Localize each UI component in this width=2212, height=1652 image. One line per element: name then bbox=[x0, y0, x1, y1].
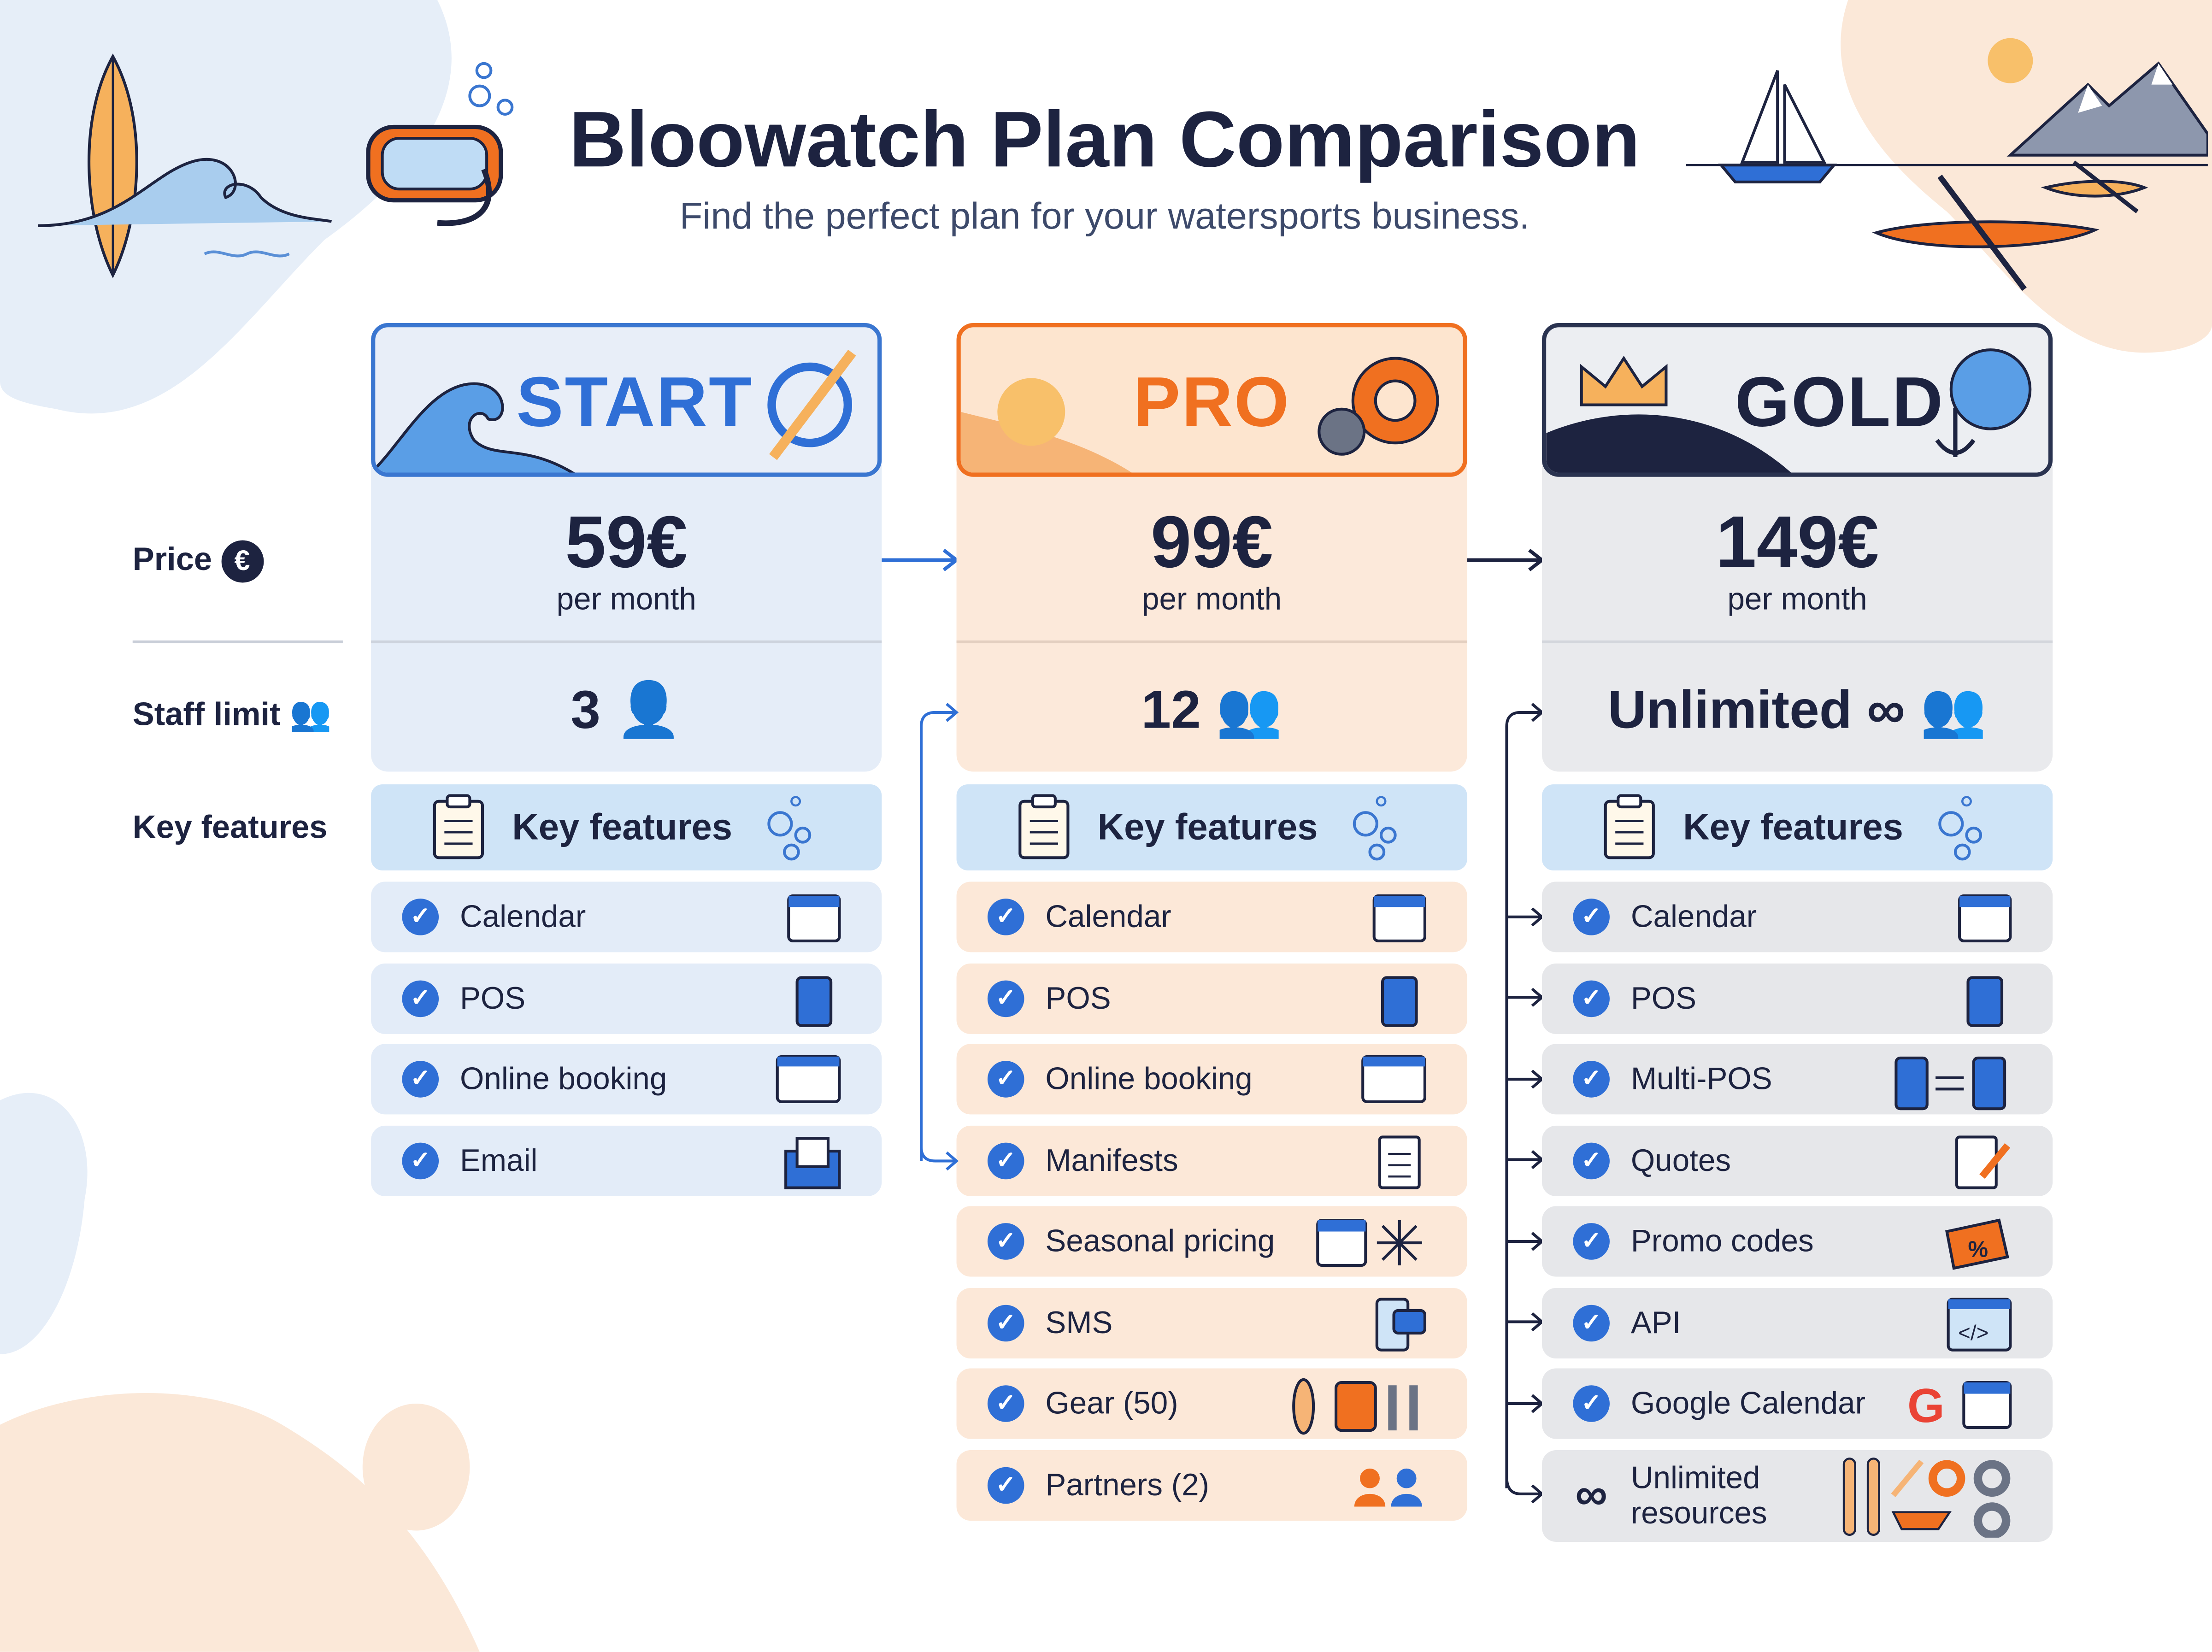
feature: SMS: SMS bbox=[1045, 1305, 1112, 1340]
feature: Seasonal pricing bbox=[957, 1206, 1467, 1276]
key features header: PRO: Key features bbox=[1098, 805, 1318, 848]
feature: Quotes: Quotes bbox=[1631, 1143, 1731, 1178]
feature: Manifests bbox=[957, 1126, 1467, 1196]
feature: Gear (50): ✓ bbox=[996, 1389, 1016, 1417]
feature: API: API bbox=[1631, 1305, 1681, 1340]
feature: POS: ✓ bbox=[996, 985, 1016, 1011]
staff: START: 3 👤 bbox=[571, 682, 682, 741]
feature: Email bbox=[371, 1126, 882, 1196]
feature: Manifests: ✓ bbox=[996, 1147, 1016, 1174]
arrow: PRO to GOLD bbox=[1467, 546, 1546, 574]
illustration: diving mask bbox=[360, 56, 522, 240]
label: price bbox=[133, 540, 263, 582]
price: PRO: per month bbox=[1142, 581, 1282, 617]
feature: API bbox=[1542, 1288, 2053, 1358]
feature: Google Calendar bbox=[1542, 1368, 2053, 1439]
feature: Manifests: Manifests bbox=[1045, 1143, 1178, 1178]
feature: Email: Email bbox=[460, 1143, 537, 1178]
price: START: 59€ bbox=[565, 502, 688, 584]
feature: Calendar: Calendar bbox=[460, 899, 586, 934]
feature: Calendar: ✓ bbox=[410, 903, 430, 929]
key features header: PRO bbox=[957, 784, 1467, 870]
feature: Email: ✓ bbox=[410, 1147, 430, 1174]
staff: PRO: 12 👥 bbox=[1141, 682, 1282, 741]
staff: GOLD: Unlimited ∞ 👥 bbox=[1608, 682, 1987, 741]
feature: Partners (2) bbox=[957, 1450, 1467, 1521]
feature: Promo codes: % bbox=[1968, 1237, 1988, 1262]
feature: Seasonal pricing: Seasonal pricing bbox=[1045, 1223, 1275, 1258]
illustration: surfboard and wave bbox=[35, 49, 346, 289]
feature: Multi-POS bbox=[1542, 1044, 2053, 1114]
feature: Promo codes bbox=[1542, 1206, 2053, 1276]
label: price: Price bbox=[133, 541, 212, 577]
feature: POS: POS bbox=[1631, 981, 1696, 1016]
feature: Calendar: ✓ bbox=[996, 903, 1016, 929]
feature: POS bbox=[371, 964, 882, 1034]
label: price: € bbox=[234, 546, 250, 577]
feature: Seasonal pricing: ✓ bbox=[996, 1227, 1016, 1254]
feature: POS: POS bbox=[460, 981, 525, 1016]
feature: POS: ✓ bbox=[410, 985, 430, 1011]
illustration: sailboat, mountains, kayaks bbox=[1686, 35, 2208, 296]
feature: POS: ✓ bbox=[1581, 985, 1601, 1011]
label: key features: Key features bbox=[133, 808, 327, 845]
arrow: START to PRO bbox=[882, 546, 961, 574]
feature: Calendar bbox=[1542, 882, 2053, 952]
label: staff limit: Staff limit 👥 bbox=[133, 695, 332, 734]
key features header: GOLD bbox=[1542, 784, 2053, 870]
feature: Quotes bbox=[1542, 1126, 2053, 1196]
feature: Online booking: Online booking bbox=[1045, 1061, 1253, 1096]
feature: Online booking bbox=[371, 1044, 882, 1114]
feature: POS bbox=[957, 964, 1467, 1034]
feature: Unlimited resources: ∞ bbox=[1575, 1469, 1607, 1519]
feature: Calendar: ✓ bbox=[1581, 903, 1601, 929]
header: GOLD: GOLD bbox=[1735, 363, 1944, 441]
feature: Promo codes: ✓ bbox=[1581, 1227, 1601, 1254]
feature: Google Calendar: G bbox=[1907, 1379, 1945, 1433]
price: PRO: 99€ bbox=[1151, 502, 1273, 584]
feature: Unlimited resources: Unlimited bbox=[1631, 1460, 1760, 1495]
header: START bbox=[371, 323, 882, 477]
feature: SMS bbox=[957, 1288, 1467, 1358]
key features header: START: Key features bbox=[512, 805, 732, 848]
feature: Partners (2): ✓ bbox=[996, 1471, 1016, 1498]
header: GOLD bbox=[1542, 323, 2053, 477]
price: PRO bbox=[957, 505, 1467, 618]
price: GOLD: 149€ bbox=[1716, 502, 1879, 584]
feature: SMS: ✓ bbox=[996, 1309, 1016, 1336]
connector: PRO to GOLD features bbox=[1495, 698, 1545, 1517]
feature: Calendar bbox=[957, 882, 1467, 952]
feature: Online booking: ✓ bbox=[410, 1065, 430, 1092]
feature: Google Calendar: ✓ bbox=[1581, 1389, 1601, 1417]
feature: Multi-POS: ✓ bbox=[1581, 1065, 1601, 1092]
feature: Multi-POS: Multi-POS bbox=[1631, 1061, 1772, 1096]
feature: Gear (50) bbox=[957, 1368, 1467, 1439]
price: START bbox=[371, 505, 882, 618]
feature: Unlimited resources: resources bbox=[1631, 1495, 1767, 1531]
header: PRO: PRO bbox=[1133, 363, 1290, 441]
feature: API: </> bbox=[1958, 1321, 1988, 1345]
price: START: per month bbox=[557, 581, 696, 617]
feature: Online booking: Online booking bbox=[460, 1061, 667, 1096]
subtitle: Find the perfect plan for your watersports business. bbox=[680, 194, 1530, 237]
feature: Online booking bbox=[957, 1044, 1467, 1114]
price: GOLD bbox=[1542, 505, 2053, 618]
feature: Promo codes: Promo codes bbox=[1631, 1223, 1814, 1258]
feature: Partners (2): Partners (2) bbox=[1045, 1467, 1209, 1502]
feature: Calendar: Calendar bbox=[1045, 899, 1171, 934]
feature: Calendar bbox=[371, 882, 882, 952]
feature: Unlimited resources bbox=[1542, 1450, 2053, 1542]
feature: POS bbox=[1542, 964, 2053, 1034]
feature: Gear (50): Gear (50) bbox=[1045, 1385, 1178, 1421]
header: START: START bbox=[516, 363, 753, 441]
price: GOLD: per month bbox=[1727, 581, 1867, 617]
feature: Online booking: ✓ bbox=[996, 1065, 1016, 1092]
connector: START to PRO features bbox=[910, 698, 959, 1178]
feature: POS: POS bbox=[1045, 981, 1111, 1016]
feature: Calendar: Calendar bbox=[1631, 899, 1757, 934]
key features header: GOLD: Key features bbox=[1683, 805, 1903, 848]
feature: API: ✓ bbox=[1581, 1309, 1601, 1336]
title: Bloowatch Plan Comparison bbox=[569, 94, 1640, 183]
feature: Quotes: ✓ bbox=[1581, 1147, 1601, 1174]
key features header: START bbox=[371, 784, 882, 870]
header: PRO bbox=[957, 323, 1467, 477]
feature: Google Calendar: Google Calendar bbox=[1631, 1385, 1865, 1421]
